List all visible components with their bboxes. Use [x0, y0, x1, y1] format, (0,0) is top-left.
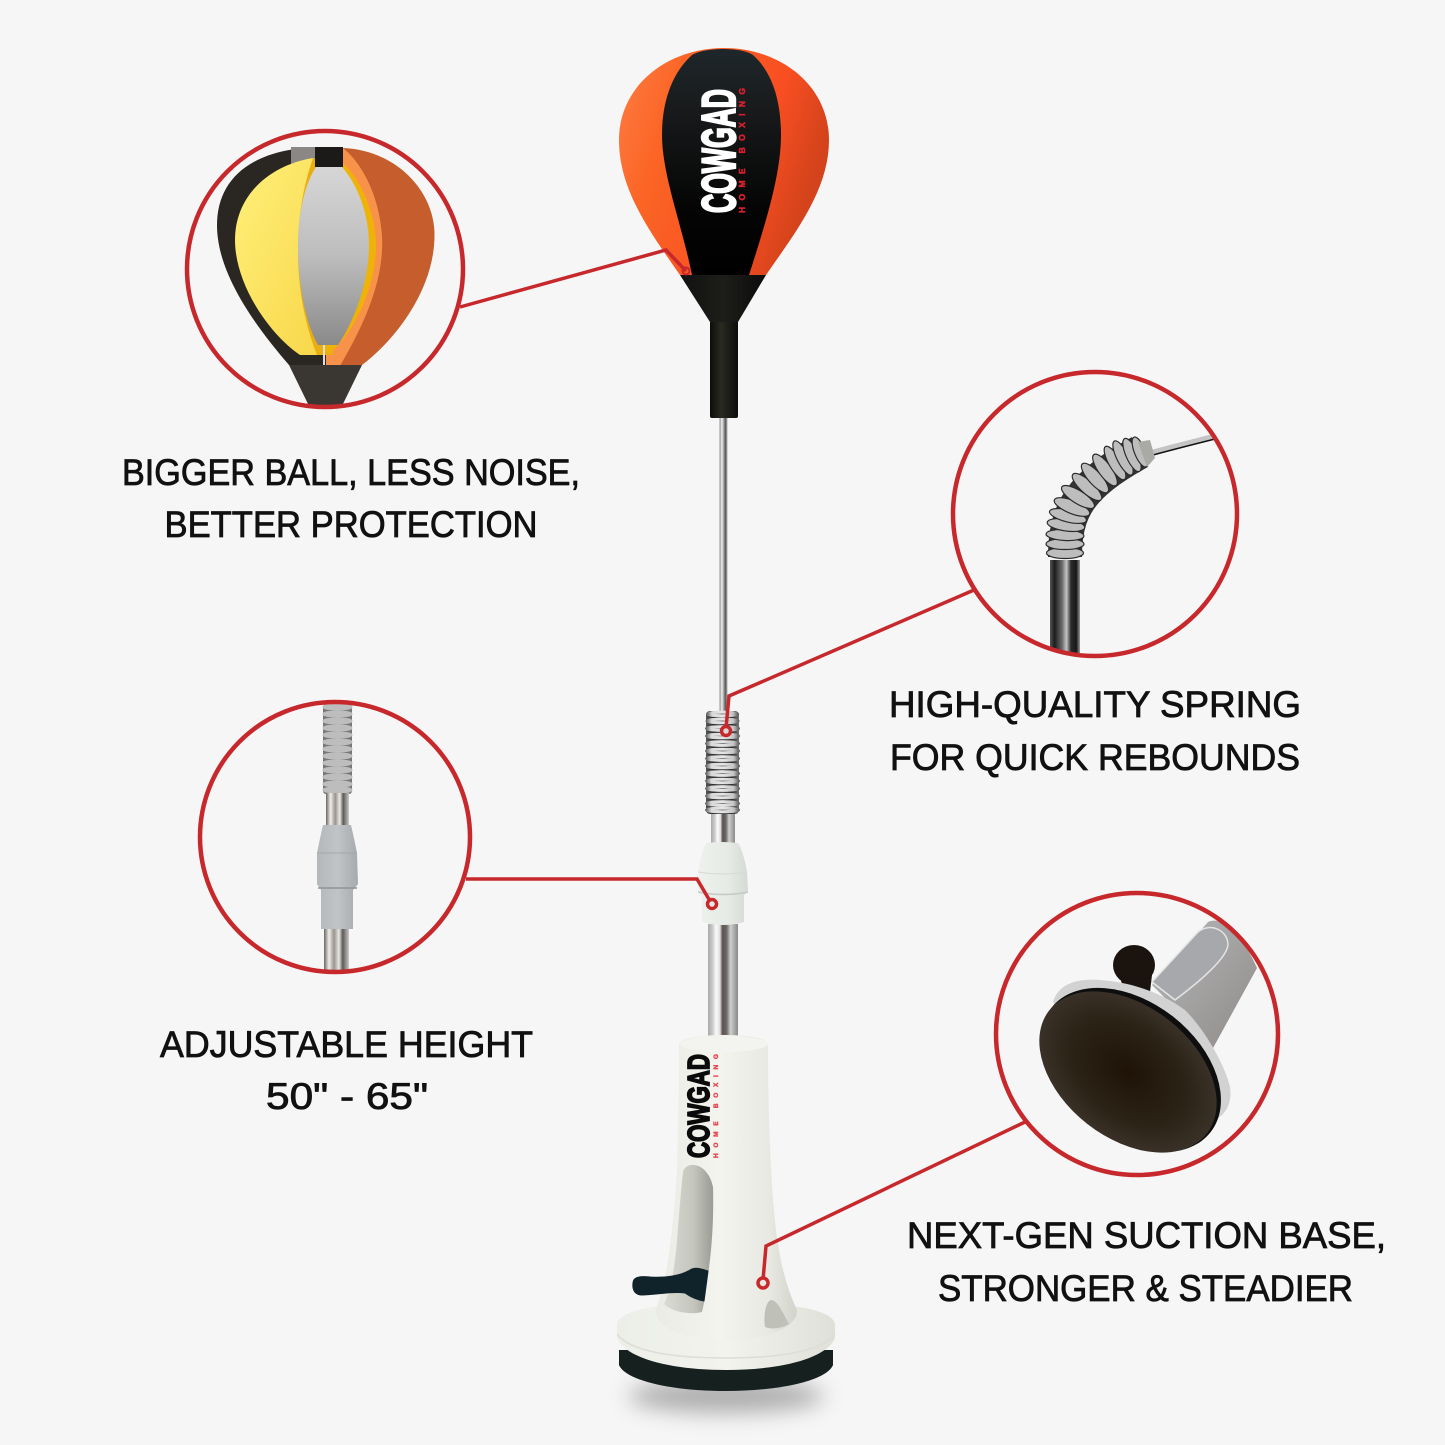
caption: ball	[122, 452, 580, 545]
caption: ball: BIGGER BALL, LESS NOISE,	[122, 452, 580, 493]
suction base	[617, 1035, 835, 1391]
locking handle	[633, 1268, 708, 1301]
connector dot: spring	[722, 726, 730, 736]
lower tube	[708, 924, 738, 1038]
caption: spring	[889, 684, 1301, 778]
base logo: COWGAD	[681, 1054, 716, 1158]
connector line: height	[466, 879, 710, 901]
height adjustment collar	[698, 842, 748, 925]
caption: height: 50" - 65"	[266, 1076, 428, 1117]
base logo	[681, 1054, 720, 1158]
floor shadow	[628, 1379, 824, 1413]
connector line: spring	[726, 590, 974, 728]
steel rod	[720, 416, 728, 712]
circle frame: base	[996, 893, 1278, 1175]
callout: ball cutaway	[122, 131, 690, 545]
inset: ball interior	[217, 147, 434, 408]
connector dot: height	[708, 900, 716, 908]
callout: spring	[722, 372, 1301, 778]
circle frame: spring	[953, 372, 1237, 656]
caption: spring: FOR QUICK REBOUNDS	[890, 737, 1300, 778]
caption: base: NEXT-GEN SUCTION BASE,	[907, 1215, 1386, 1256]
circle frame: ball	[187, 131, 463, 407]
connector dot: base	[758, 1278, 768, 1288]
caption: base: STRONGER & STEADIER	[938, 1268, 1353, 1309]
connector line: base	[763, 1122, 1025, 1280]
ball logo: HOME BOXING	[737, 88, 747, 213]
side hole	[764, 1300, 789, 1328]
callout: adjustable height	[160, 702, 716, 1117]
punching ball	[619, 48, 829, 418]
connector dot: ball	[682, 268, 690, 274]
base logo: HOME BOXING	[713, 1054, 720, 1158]
caption: spring: HIGH-QUALITY SPRING	[889, 684, 1301, 725]
connector line: ball	[460, 250, 686, 307]
ball logo	[692, 88, 747, 213]
circle frame: height	[200, 702, 470, 972]
caption: height	[160, 1024, 533, 1117]
spring	[706, 711, 739, 814]
callout: suction base	[758, 893, 1386, 1309]
inset: suction cup underside	[1039, 920, 1257, 1153]
inset: bent spring	[1046, 435, 1215, 654]
product: punching ball on stand	[617, 48, 835, 1413]
upper tube	[711, 814, 735, 844]
ball logo: COWGAD	[692, 89, 745, 213]
caption: ball: BETTER PROTECTION	[164, 504, 538, 545]
caption: height: ADJUSTABLE HEIGHT	[160, 1024, 533, 1065]
base slot	[664, 1165, 713, 1313]
inset: telescopic collar	[317, 704, 358, 972]
caption: base	[907, 1215, 1386, 1309]
